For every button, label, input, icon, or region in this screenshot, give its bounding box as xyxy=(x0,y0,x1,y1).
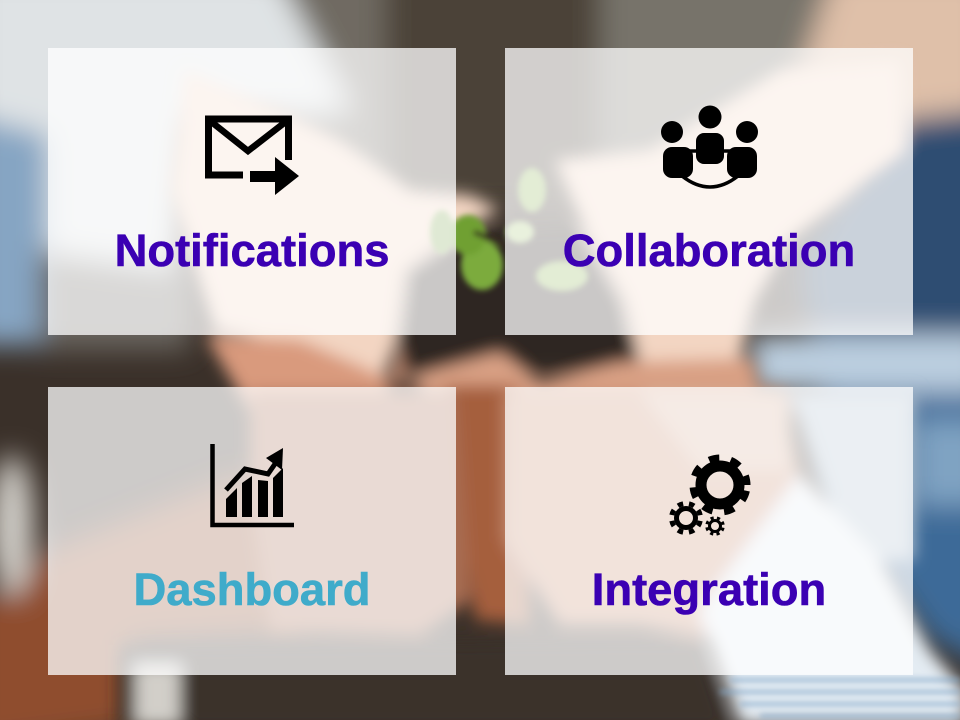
heading: Dashboard: Dashboard xyxy=(133,564,371,615)
icon: three gears xyxy=(669,454,750,536)
heading: Notifications: Notifications xyxy=(115,225,389,276)
panel: integration xyxy=(505,387,913,675)
heading: Integration: Integration xyxy=(592,564,826,615)
icon: group of people xyxy=(661,106,758,189)
panel: notifications xyxy=(48,48,456,335)
icon: rising bar chart xyxy=(210,444,294,528)
panel: collaboration xyxy=(505,48,913,335)
icon: envelope with arrow xyxy=(205,116,299,195)
panel: dashboard xyxy=(48,387,456,675)
shirt stripes xyxy=(720,680,960,716)
heading: Collaboration: Collaboration xyxy=(563,225,855,276)
seedling leaves xyxy=(430,168,588,291)
